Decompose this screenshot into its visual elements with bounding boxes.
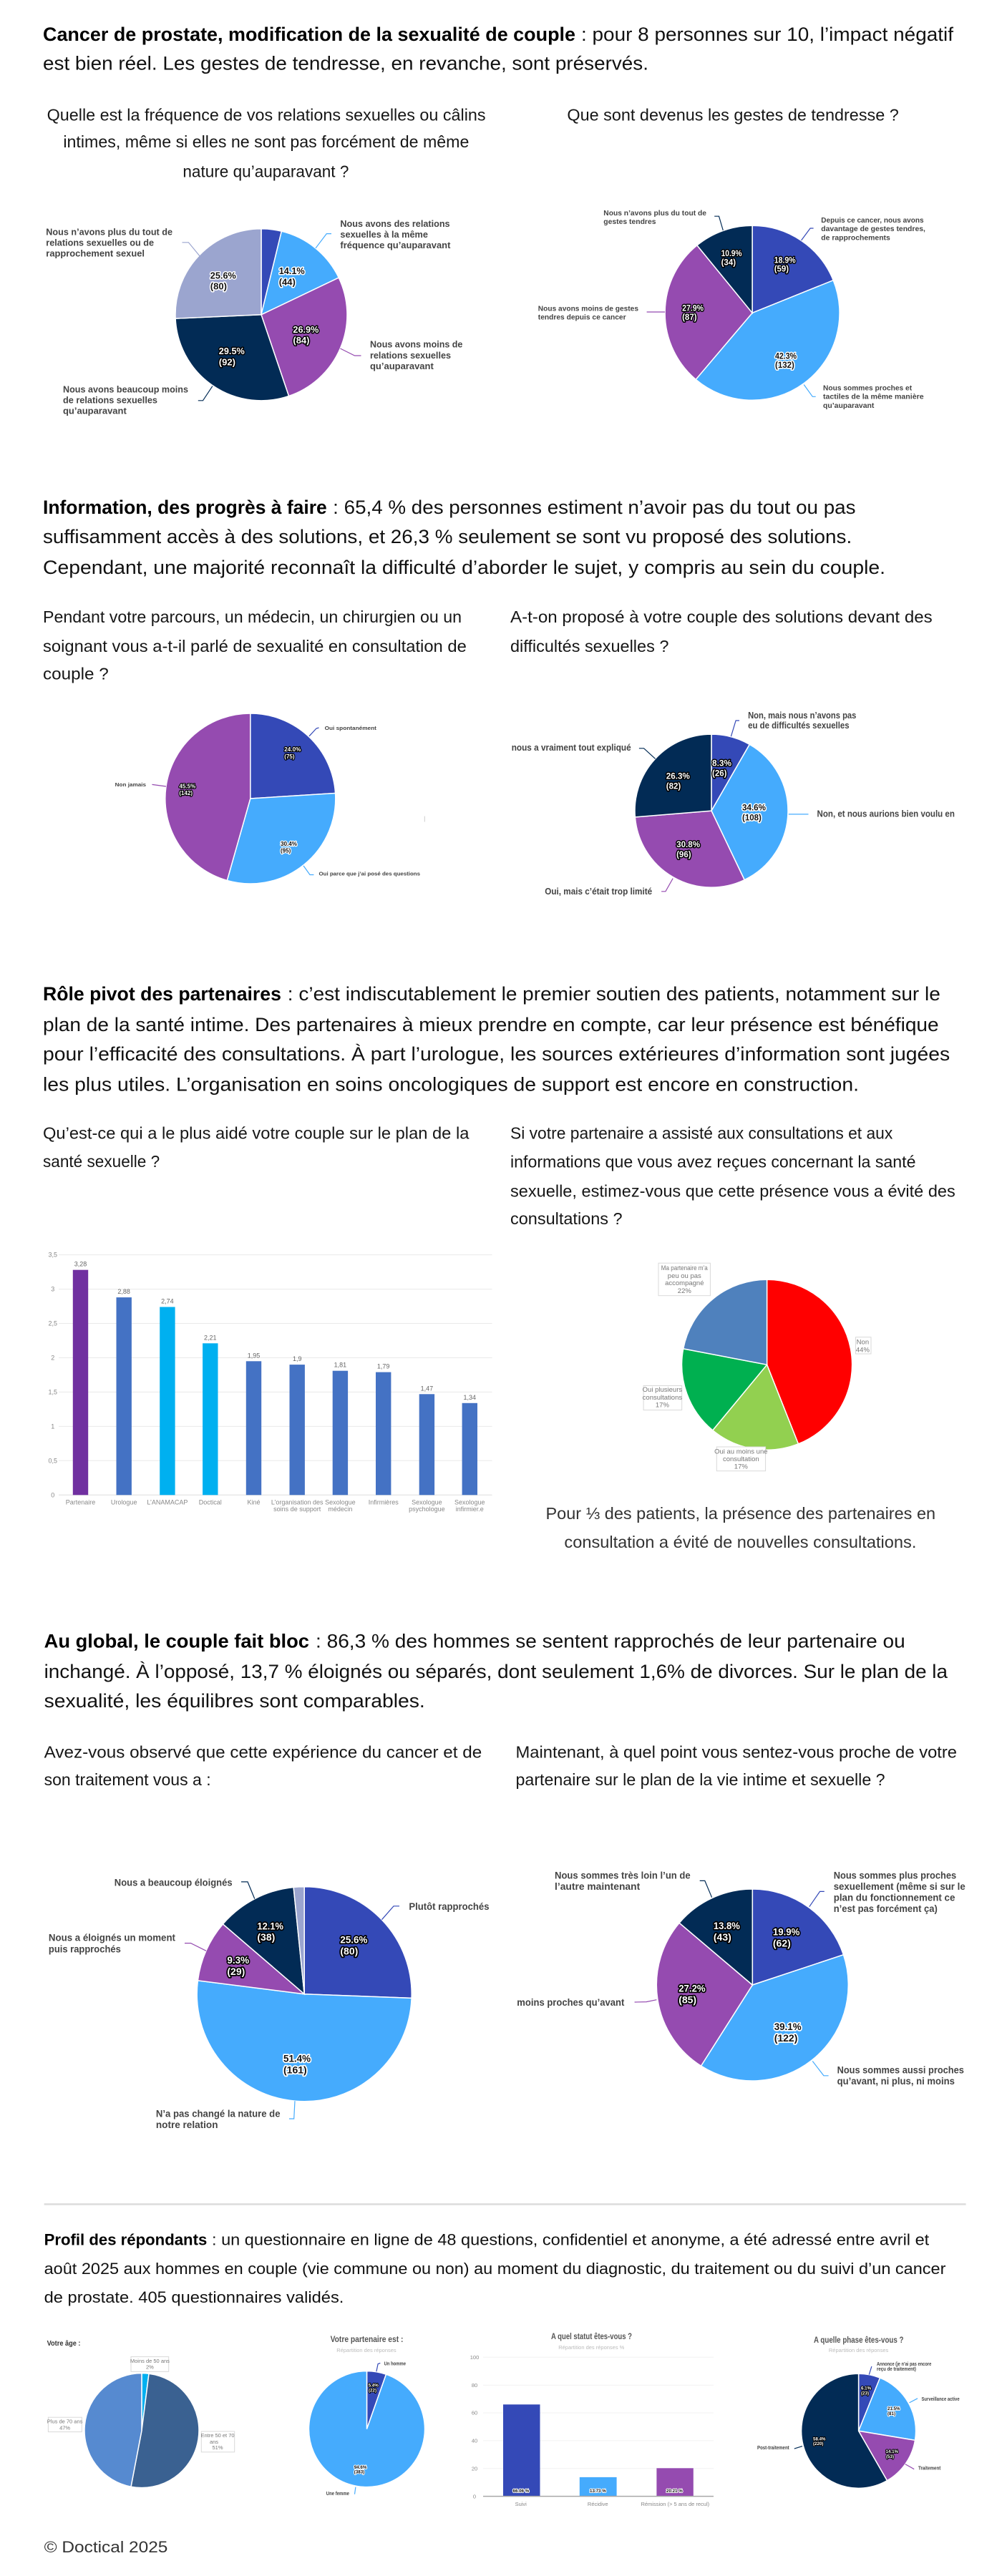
pie chart: effet sur le couple xyxy=(49,1878,489,2130)
pie chart: sexualité en consultation xyxy=(115,713,424,884)
bar chart: ce qui a le plus aidé: 3,5 xyxy=(48,1252,57,1259)
heading text block: Cependant, une majorité reconnaît la difficulté d’aborder le sujet, y compris au sein du couple. xyxy=(43,557,885,578)
pie chart: phase: Traitement xyxy=(918,2466,941,2471)
heading text block xyxy=(43,983,950,1095)
pie chart: consultations évitées xyxy=(643,1263,871,1471)
question: fréquence des relations xyxy=(47,105,486,180)
bar chart: ce qui a le plus aidé: Infirmières xyxy=(369,1499,399,1506)
pie chart: proximité intime: 19.9% xyxy=(773,1926,800,1938)
pie chart: fréquence des relations sexuelles: qu’auparavant xyxy=(370,361,434,371)
pie chart: gestes de tendresse: 27.9% xyxy=(682,304,704,313)
question: présence du partenaire: informations que vous avez reçues concernant la santé xyxy=(510,1152,916,1171)
bar chart: statut: 0 xyxy=(473,2493,476,2499)
heading text block: inchangé. À l’opposé, 13,7 % éloignés ou séparés, dont seulement 1,6% de divorces. Sur le plan de la xyxy=(44,1661,948,1682)
pie chart: fréquence des relations sexuelles: 29.5% xyxy=(219,346,245,356)
pie chart: effet sur le couple: 25.6% xyxy=(340,1934,368,1946)
pie chart: solutions proposées au couple: nous a vraiment tout expliqué xyxy=(512,743,631,753)
pie chart: fréquence des relations sexuelles: Nous n’avons plus du tout de xyxy=(46,227,172,237)
pie chart: sexualité en consultation: Oui parce que j’ai posé des questions xyxy=(319,871,420,877)
caption: un tiers des patients xyxy=(545,1504,935,1551)
pie chart: sexualité en consultation: Oui spontanément xyxy=(325,725,376,731)
pie chart: solutions proposées au couple: 26.3% xyxy=(666,773,690,781)
pie chart: fréquence des relations sexuelles: sexuelles à la même xyxy=(340,230,428,240)
pie chart: phase: Annonce (je n’ai pas encore xyxy=(877,2362,931,2367)
pie chart: votre partenaire xyxy=(309,2336,425,2497)
pie chart: gestes de tendresse: (87) xyxy=(682,313,697,322)
pie chart: proximité intime: (43) xyxy=(714,1931,731,1943)
bar chart: ce qui a le plus aidé: psychologue xyxy=(409,1506,445,1513)
bar chart: ce qui a le plus aidé: 1,34 xyxy=(464,1394,476,1401)
bar chart: ce qui a le plus aidé: 2,21 xyxy=(204,1334,217,1341)
pie chart: solutions proposées au couple: Oui, mais c’était trop limité xyxy=(545,887,652,897)
heading text block xyxy=(43,24,954,74)
pie chart: gestes de tendresse: Nous n’avons plus du tout de xyxy=(603,209,706,218)
bar chart: statut: Répartition des réponses % xyxy=(558,2344,625,2351)
pie chart: fréquence des relations sexuelles: Nous avons beaucoup moins xyxy=(63,384,188,394)
pie chart: votre âge xyxy=(47,2339,235,2488)
pie chart: proximité intime: Nous sommes très loin l’un de xyxy=(555,1870,691,1880)
pie chart: sexualité en consultation: Non jamais xyxy=(115,781,146,788)
pie chart: proximité intime xyxy=(517,1870,965,2087)
pie chart: effet sur le couple: Plutôt rapprochés xyxy=(409,1901,490,1912)
caption: un tiers des patients: consultation a évité de nouvelles consultations. xyxy=(564,1533,916,1551)
pie chart: votre partenaire: (22) xyxy=(369,2389,376,2393)
bar chart: statut: 20.21 % xyxy=(666,2489,683,2494)
heading text block: Au global, le couple fait bloc xyxy=(44,1631,309,1652)
question: aide au couple: santé sexuelle ? xyxy=(43,1152,160,1171)
bar chart: statut: 80 xyxy=(472,2382,477,2389)
heading text block: suffisamment accès à des solutions, et 26,3 % seulement se sont vu proposé des solutions. xyxy=(43,526,852,547)
bar chart: statut: 66.06 % xyxy=(512,2489,530,2494)
bar chart: ce qui a le plus aidé: Sexologue xyxy=(454,1499,485,1506)
pie chart: votre partenaire: Une femme xyxy=(326,2492,349,2497)
pie chart: votre âge: ans xyxy=(210,2439,218,2445)
bar chart: statut: A quel statut êtes-vous ? xyxy=(551,2333,632,2341)
pie chart: proximité intime: sexuellement (même si sur le xyxy=(834,1881,965,1892)
bar chart: ce qui a le plus aidé: Sexologue xyxy=(325,1499,356,1506)
heading text block: Cancer de prostate, modification de la sexualité de couple xyxy=(43,24,575,45)
pie chart: solutions proposées au couple: 30.8% xyxy=(676,841,700,849)
heading text block: Information, des progrès à faire xyxy=(43,497,327,518)
pie chart: effet sur le couple: puis rapprochés xyxy=(49,1943,121,1954)
pie chart: effet sur le couple: notre relation xyxy=(156,2119,218,2130)
pie chart: fréquence des relations sexuelles: relations sexuelles ou de xyxy=(46,238,154,248)
heading text block: : un questionnaire en ligne de 48 questions, confidentiel et anonyme, a été adressé entre avril et xyxy=(212,2231,930,2248)
section: au global, le couple fait bloc xyxy=(44,1631,965,2130)
pie chart: consultations évitées: Ma partenaire m’a xyxy=(661,1264,708,1272)
question: proximité intime: Maintenant, à quel point vous sentez-vous proche de votre xyxy=(515,1742,957,1761)
pie chart: votre partenaire: Répartition des réponses xyxy=(336,2347,397,2353)
pie chart: fréquence des relations sexuelles: Nous avons des relations xyxy=(340,219,450,229)
heading text block: plan de la santé intime. Des partenaires à mieux prendre en compte, car leur présence est bénéfique xyxy=(43,1014,939,1035)
question: présence du partenaire: consultations ? xyxy=(510,1209,623,1228)
question: fréquence des relations: intimes, même si elles ne sont pas forcément de même xyxy=(63,132,469,151)
pie chart: solutions proposées au couple xyxy=(512,711,955,897)
pie chart: gestes de tendresse: gestes tendres xyxy=(603,218,656,226)
question: expérience du cancer xyxy=(44,1742,482,1789)
question: parcours et médecin xyxy=(43,608,467,683)
pie chart: proximité intime: (62) xyxy=(773,1938,791,1949)
pie chart: gestes de tendresse: Depuis ce cancer, nous avons xyxy=(821,216,924,225)
pie chart: consultations évitées: consultations xyxy=(643,1394,682,1402)
section: information, des progrès à faire xyxy=(43,497,955,897)
question: parcours et médecin: soignant vous a-t-il parlé de sexualité en consultation de xyxy=(43,637,467,655)
pie chart: votre âge: 51% xyxy=(212,2444,223,2451)
pie chart: effet sur le couple: (80) xyxy=(340,1946,358,1957)
pie chart: effet sur le couple: 9.3% xyxy=(227,1954,250,1966)
bar chart: ce qui a le plus aidé: infirmier.e xyxy=(456,1506,484,1513)
question: parcours et médecin: Pendant votre parcours, un médecin, un chirurgien ou un xyxy=(43,608,462,626)
question: aide au couple: Qu’est-ce qui a le plus aidé votre couple sur le plan de la xyxy=(43,1123,470,1142)
bar chart: statut: Suivi xyxy=(515,2501,527,2507)
pie chart: fréquence des relations sexuelles: de relations sexuelles xyxy=(63,396,157,406)
pie chart: effet sur le couple: Nous a éloignés un moment xyxy=(49,1933,175,1943)
pie chart: phase: 58.4% xyxy=(813,2437,826,2442)
pie chart: phase: Surveillance active xyxy=(922,2397,960,2402)
section: profil des répondants xyxy=(44,2231,960,2507)
pie chart: proximité intime: qu’avant, ni plus, ni moins xyxy=(837,2076,955,2087)
pie chart: fréquence des relations sexuelles: fréquence qu’auparavant xyxy=(340,240,451,250)
pie chart: sexualité en consultation: 45.5% xyxy=(179,783,195,790)
question: présence du partenaire xyxy=(510,1124,955,1228)
pie chart: phase: 6.1% xyxy=(861,2386,872,2391)
heading text block: est bien réel. Les gestes de tendresse, en revanche, sont préservés. xyxy=(43,53,648,74)
pie chart: effet sur le couple: 12.1% xyxy=(257,1920,284,1931)
pie chart: proximité intime: 39.1% xyxy=(774,2021,802,2032)
question: proximité intime: partenaire sur le plan de la vie intime et sexuelle ? xyxy=(515,1770,885,1789)
pie chart: fréquence des relations sexuelles: relations sexuelles xyxy=(370,351,451,361)
pie chart: fréquence des relations sexuelles: (84) xyxy=(293,335,310,346)
pie chart: proximité intime: 27.2% xyxy=(678,1982,706,1994)
bar chart: ce qui a le plus aidé: Kiné xyxy=(247,1499,261,1506)
pie chart: fréquence des relations sexuelles xyxy=(46,219,462,416)
pie chart: consultations évitées: Non xyxy=(857,1338,869,1347)
pie chart: phase: (81) xyxy=(887,2411,895,2416)
question: gestes de tendresse: Que sont devenus les gestes de tendresse ? xyxy=(567,105,899,124)
heading text block: : 65,4 % des personnes estiment n’avoir pas du tout ou pas xyxy=(333,497,856,518)
bar chart: ce qui a le plus aidé: Urologue xyxy=(111,1499,137,1506)
question: solutions proposées: difficultés sexuelles ? xyxy=(510,637,668,655)
heading text block: : c’est indiscutablement le premier soutien des patients, notamment sur le xyxy=(288,983,940,1005)
question: expérience du cancer: son traitement vous a : xyxy=(44,1770,211,1789)
pie chart: consultations évitées: Oui plusieurs xyxy=(643,1386,682,1394)
pie chart: gestes de tendresse: tactiles de la même manière xyxy=(823,393,924,401)
bar chart: ce qui a le plus aidé: Sexologue xyxy=(412,1499,442,1506)
pie chart: gestes de tendresse: (132) xyxy=(775,361,794,370)
pie chart: gestes de tendresse: tendres depuis ce cancer xyxy=(538,313,626,322)
bar chart: ce qui a le plus aidé: 1,79 xyxy=(377,1363,389,1370)
caption: un tiers des patients: Pour ⅓ des patients, la présence des partenaires en xyxy=(545,1504,935,1523)
pie chart: fréquence des relations sexuelles: 25.6% xyxy=(210,270,236,280)
pie chart: consultations évitées: consultation xyxy=(723,1455,759,1463)
pie chart: fréquence des relations sexuelles: 26.9% xyxy=(293,324,319,335)
pie chart: gestes de tendresse: 18.9% xyxy=(774,256,796,265)
bar chart: ce qui a le plus aidé: médecin xyxy=(328,1506,352,1513)
heading text block: pour l’efficacité des consultations. À part l’urologue, les sources extérieures d’information sont jugées xyxy=(43,1043,950,1065)
question: solutions proposées: A-t-on proposé à votre couple des solutions devant des xyxy=(510,608,933,626)
pie chart: votre partenaire: (383) xyxy=(354,2469,364,2474)
pie chart: sexualité en consultation: 24.0% xyxy=(284,746,301,753)
bar chart: ce qui a le plus aidé xyxy=(48,1252,492,1513)
question: parcours et médecin: couple ? xyxy=(43,665,109,683)
pie chart: proximité intime: n’est pas forcément ça) xyxy=(834,1903,938,1914)
pie chart: proximité intime: Nous sommes plus proches xyxy=(834,1870,956,1880)
bar chart: ce qui a le plus aidé: 1 xyxy=(51,1423,54,1430)
bar chart: ce qui a le plus aidé: Doctical xyxy=(199,1499,222,1506)
pie chart: phase xyxy=(757,2336,960,2488)
bar chart: ce qui a le plus aidé: 2,74 xyxy=(161,1298,174,1305)
pie chart: solutions proposées au couple: (96) xyxy=(676,851,691,859)
bar chart: ce qui a le plus aidé: 3,28 xyxy=(74,1261,87,1268)
pie chart: gestes de tendresse: (34) xyxy=(721,258,736,267)
pie chart: gestes de tendresse: 42.3% xyxy=(775,353,797,361)
pie chart: solutions proposées au couple: eu de difficultés sexuelles xyxy=(748,721,850,731)
pie chart: phase: Post-traitement xyxy=(757,2446,789,2451)
pie chart: solutions proposées au couple: Non, et nous aurions bien voulu en xyxy=(817,809,955,819)
bar chart: ce qui a le plus aidé: 1,47 xyxy=(421,1385,433,1392)
question: aide au couple xyxy=(43,1123,470,1171)
pie chart: phase: Répartition des réponses xyxy=(829,2347,889,2353)
question: fréquence des relations: nature qu’auparavant ? xyxy=(183,162,349,180)
heading text block: de prostate. 405 questionnaires validés. xyxy=(44,2288,344,2306)
pie chart: phase: (220) xyxy=(813,2441,823,2446)
pie chart: proximité intime: moins proches qu’avant xyxy=(517,1997,625,2008)
pie chart: consultations évitées: 44% xyxy=(856,1346,870,1354)
pie chart: sexualité en consultation: 30.4% xyxy=(281,841,297,847)
pie chart: votre âge: Plus de 70 ans xyxy=(47,2418,83,2424)
pie chart: votre partenaire: Votre partenaire est : xyxy=(331,2336,403,2344)
bar chart: ce qui a le plus aidé: 3 xyxy=(51,1286,54,1293)
bar chart: ce qui a le plus aidé: soins de support xyxy=(273,1506,321,1513)
pie chart: consultations évitées: accompagné xyxy=(665,1279,704,1287)
pie chart: effet sur le couple: (161) xyxy=(283,2064,307,2075)
bar chart: statut: 40 xyxy=(472,2438,477,2444)
pie chart: consultations évitées: 17% xyxy=(734,1463,748,1470)
bar chart: ce qui a le plus aidé: 0,5 xyxy=(48,1457,57,1464)
pie chart: sexualité en consultation: (75) xyxy=(284,753,295,760)
pie chart: phase: A quelle phase êtes-vous ? xyxy=(814,2336,903,2345)
pie chart: effet sur le couple: (29) xyxy=(227,1966,245,1977)
heading text block: : pour 8 personnes sur 10, l’impact négatif xyxy=(581,24,954,45)
pie chart: gestes de tendresse: Nous sommes proches et xyxy=(823,384,913,392)
bar chart: ce qui a le plus aidé: 1,5 xyxy=(48,1388,57,1395)
pie chart: gestes de tendresse: (59) xyxy=(774,265,789,274)
heading text block: août 2025 aux hommes en couple (vie commune ou non) au moment du diagnostic, du traitement ou du suivi d’un cancer xyxy=(44,2260,946,2278)
pie chart: effet sur le couple: 51.4% xyxy=(283,2052,311,2064)
pie chart: sexualité en consultation: (95) xyxy=(281,848,291,854)
pie chart: votre partenaire: 94.6% xyxy=(354,2465,367,2470)
pie chart: fréquence des relations sexuelles: (92) xyxy=(219,356,235,368)
bar chart: ce qui a le plus aidé: L’organisation des xyxy=(271,1499,324,1506)
pie chart: gestes de tendresse: davantage de gestes tendres, xyxy=(821,225,925,233)
question: présence du partenaire: Si votre partenaire a assisté aux consultations et aux xyxy=(510,1124,893,1143)
pie chart: fréquence des relations sexuelles: (80) xyxy=(210,280,227,292)
pie chart: fréquence des relations sexuelles: qu’auparavant xyxy=(63,406,127,416)
pie chart: votre âge: 47% xyxy=(59,2424,70,2431)
pie chart: proximité intime: plan du fonctionnement ce xyxy=(834,1892,955,1903)
pie chart: solutions proposées au couple: 34.6% xyxy=(742,804,766,813)
pie chart: gestes de tendresse: Nous avons moins de gestes xyxy=(538,304,638,313)
bar chart: statut: 100 xyxy=(470,2354,479,2361)
heading text block xyxy=(44,1631,948,1712)
heading text block: sexualité, les équilibres sont comparables. xyxy=(44,1690,425,1712)
pie chart: proximité intime: Nous sommes aussi proches xyxy=(837,2064,964,2075)
section: cancer de prostate, modification de la sexualité xyxy=(43,24,954,416)
pie chart: phase: (53) xyxy=(886,2454,894,2459)
bar chart: statut xyxy=(470,2333,714,2507)
pie chart: consultations évitées: 22% xyxy=(678,1287,691,1295)
heading text block: : 86,3 % des hommes se sentent rapprochés de leur partenaire ou xyxy=(316,1631,905,1652)
pie chart: effet sur le couple: (38) xyxy=(257,1931,275,1943)
bar chart: ce qui a le plus aidé: 0 xyxy=(51,1491,54,1498)
bar chart: statut: Rémission (> 5 ans de recul) xyxy=(641,2501,710,2507)
bar chart: ce qui a le plus aidé: Partenaire xyxy=(66,1499,95,1506)
bar chart: ce qui a le plus aidé: 2,88 xyxy=(117,1288,130,1295)
pie chart: proximité intime: (85) xyxy=(678,1994,696,2005)
pie chart: votre partenaire: 5.4% xyxy=(369,2384,379,2389)
pie chart: proximité intime: l’autre maintenant xyxy=(555,1881,641,1892)
heading text block: Profil des répondants xyxy=(44,2231,207,2248)
pie chart: gestes de tendresse: 10.9% xyxy=(721,250,742,258)
pie chart: effet sur le couple: Nous a beaucoup éloignés xyxy=(115,1878,233,1888)
bar chart: ce qui a le plus aidé: 2,5 xyxy=(48,1319,57,1327)
pie chart: gestes de tendresse xyxy=(538,209,925,410)
heading text block xyxy=(44,2231,946,2306)
heading text block: les plus utiles. L’organisation en soins oncologiques de support est encore en construction. xyxy=(43,1073,859,1095)
pie chart: effet sur le couple: N’a pas changé la nature de xyxy=(156,2108,281,2119)
pie chart: phase: reçu de traitement) xyxy=(877,2367,916,2372)
pie chart: votre partenaire: Un homme xyxy=(384,2361,406,2366)
bar chart: ce qui a le plus aidé: 1,9 xyxy=(293,1355,301,1362)
section: rôle pivot des partenaires xyxy=(43,983,955,1551)
pie chart: solutions proposées au couple: Non, mais nous n’avons pas xyxy=(748,711,856,721)
pie chart: votre âge: Moins de 50 ans xyxy=(130,2358,170,2364)
pie chart: fréquence des relations sexuelles: rapprochement sexuel xyxy=(46,249,145,259)
pie chart: phase: 21.5% xyxy=(887,2406,900,2411)
pie chart: consultations évitées: peu ou pas xyxy=(668,1272,701,1280)
bar chart: statut: 20 xyxy=(472,2465,477,2472)
bar chart: ce qui a le plus aidé: L’ANAMACAP xyxy=(147,1499,188,1506)
pie chart: proximité intime: (122) xyxy=(774,2032,797,2044)
pie chart: solutions proposées au couple: (108) xyxy=(742,814,762,823)
heading text block: Rôle pivot des partenaires xyxy=(43,983,281,1005)
question: présence du partenaire: sexuelle, estimez-vous que cette présence vous a évité des xyxy=(510,1182,955,1201)
pie chart: votre âge: Votre âge : xyxy=(47,2339,80,2348)
pie chart: phase: (23) xyxy=(861,2391,869,2396)
pie chart: votre âge: 2% xyxy=(146,2364,154,2371)
question: proximité intime xyxy=(515,1742,957,1789)
bar chart: statut: Récidive xyxy=(588,2501,608,2507)
pie chart: consultations évitées: Oui au moins une xyxy=(714,1448,768,1455)
pie chart: proximité intime: 13.8% xyxy=(714,1920,740,1931)
bar chart: statut: 13.73 % xyxy=(590,2489,606,2494)
pie chart: votre âge: Entre 50 et 70 xyxy=(200,2432,235,2439)
footer: copyright: © Doctical 2025 xyxy=(44,2538,167,2556)
question: expérience du cancer: Avez-vous observé que cette expérience du cancer et de xyxy=(44,1742,482,1761)
heading text block xyxy=(43,497,885,578)
bar chart: ce qui a le plus aidé: 1,95 xyxy=(248,1352,260,1359)
question: solutions proposées xyxy=(510,608,933,655)
pie chart: gestes de tendresse: de rapprochements xyxy=(821,233,890,242)
pie chart: solutions proposées au couple: (82) xyxy=(666,782,681,791)
bar chart: statut: 60 xyxy=(472,2410,477,2416)
pie chart: solutions proposées au couple: 8.3% xyxy=(712,759,731,768)
pie chart: fréquence des relations sexuelles: (44) xyxy=(279,277,296,288)
bar chart: ce qui a le plus aidé: 1,81 xyxy=(334,1362,346,1369)
pie chart: consultations évitées: 17% xyxy=(656,1401,669,1409)
question: fréquence des relations: Quelle est la fréquence de vos relations sexuelles ou câlins xyxy=(47,105,486,124)
pie chart: gestes de tendresse: qu’auparavant xyxy=(823,401,875,410)
pie chart: phase: 14.1% xyxy=(886,2449,899,2454)
pie chart: fréquence des relations sexuelles: 14.1% xyxy=(279,265,305,276)
bar chart: ce qui a le plus aidé: 2 xyxy=(51,1354,54,1361)
pie chart: sexualité en consultation: (142) xyxy=(179,790,193,796)
pie chart: fréquence des relations sexuelles: Nous avons moins de xyxy=(370,340,462,350)
pie chart: solutions proposées au couple: (26) xyxy=(712,770,727,779)
